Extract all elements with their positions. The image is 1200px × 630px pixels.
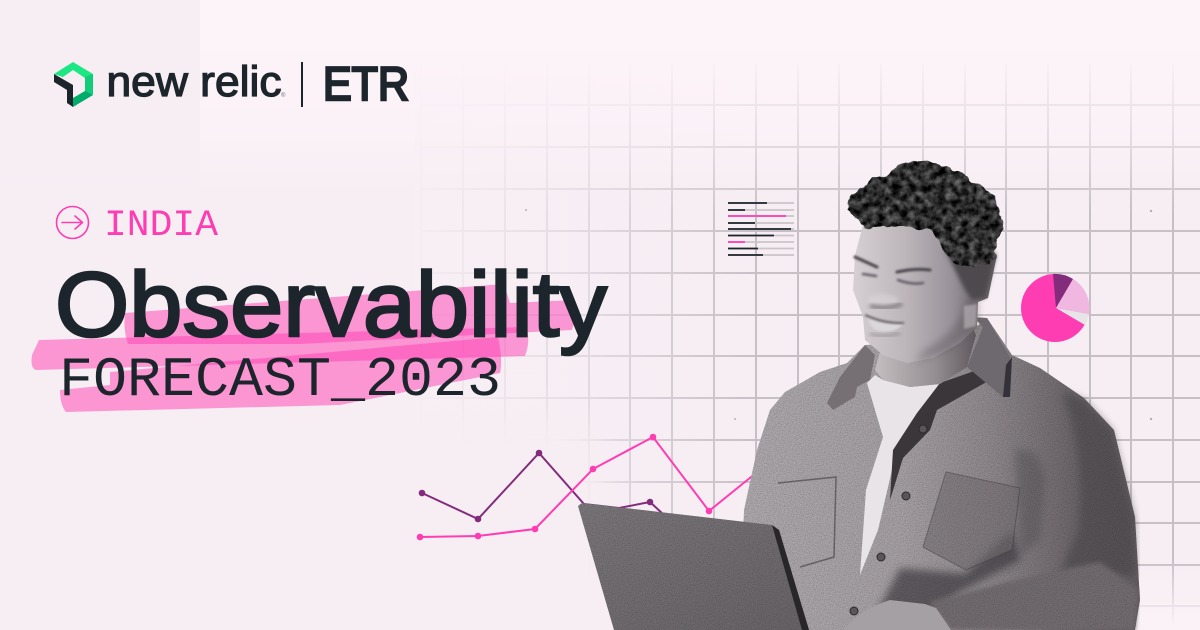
tag: India [56, 205, 219, 247]
label: INDIA: INDIA [104, 205, 219, 247]
mouth [868, 318, 904, 332]
neck highlight [964, 304, 977, 329]
background grid [200, 50, 1200, 630]
nose [868, 294, 898, 306]
eyes [863, 274, 923, 284]
wordmark: new relic: new relic [106, 58, 282, 106]
icon: circled arrow [56, 206, 88, 238]
wordmark: ETR: ETR [323, 57, 409, 110]
hair [846, 160, 1004, 266]
neck [875, 300, 976, 387]
right pocket [923, 472, 1020, 570]
series: purple line [419, 450, 664, 522]
eyebrows [855, 257, 930, 272]
dark placket shadow [890, 368, 990, 500]
t-shirt [860, 375, 940, 575]
divider [301, 62, 303, 107]
laptop [578, 503, 809, 630]
ear and temple shadow [945, 235, 996, 300]
line chart [417, 434, 756, 540]
bar list chart [728, 203, 794, 255]
title: Observability: Observability [55, 254, 607, 356]
shirt [742, 318, 1140, 630]
icon: new relic cube [54, 62, 93, 107]
logo: new relic and ETR [54, 57, 409, 110]
hand [844, 600, 951, 630]
subtitle: FORECAST_2023: FORECAST_2023 [59, 348, 501, 412]
left pocket [778, 477, 836, 567]
registered mark: ® [281, 92, 286, 99]
person with laptop [578, 160, 1140, 630]
face [853, 225, 997, 363]
shirt buttons [850, 425, 927, 615]
pie chart [1021, 274, 1090, 342]
pink brush highlight [32, 284, 575, 412]
collar [827, 317, 1012, 410]
series: pink line [417, 434, 756, 540]
